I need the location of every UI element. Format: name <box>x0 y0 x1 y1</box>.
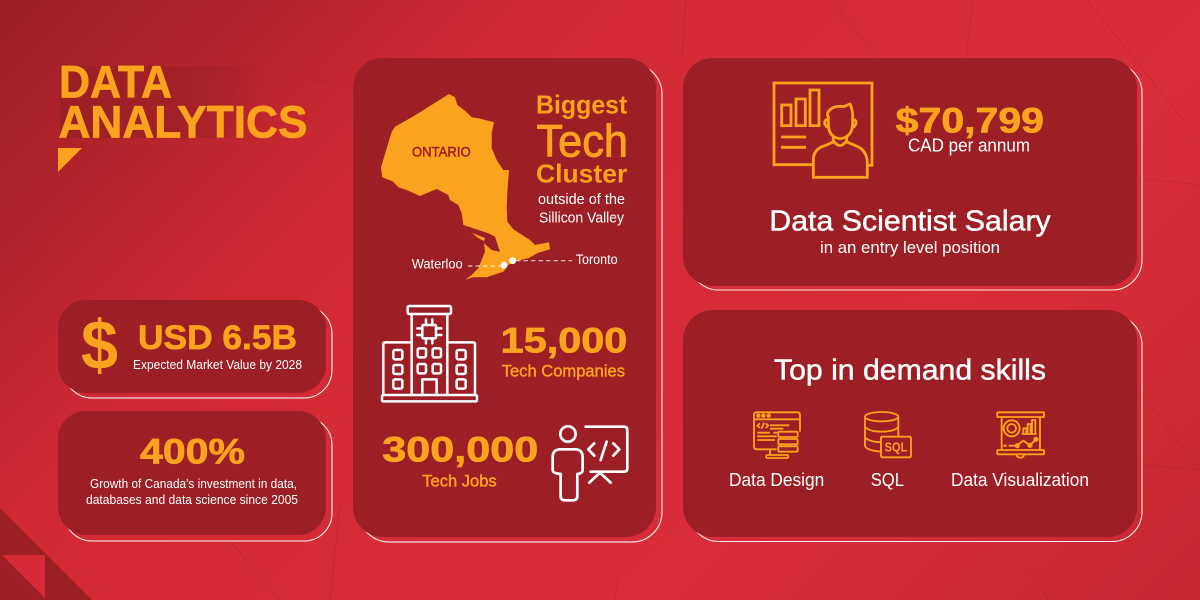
title accent triangle <box>58 148 82 172</box>
market value caption: Expected Market Value by 2028 <box>133 357 302 372</box>
market value figure: USD 6.5B <box>138 319 297 357</box>
marker: Waterloo: Waterloo <box>412 256 463 271</box>
heading: biggest tech cluster: Tech <box>536 116 628 167</box>
marker: Toronto <box>509 252 618 267</box>
icon: presentation board with charts <box>997 412 1044 458</box>
icon: tech building <box>382 306 477 401</box>
salary figure: $70,799 <box>896 101 1044 140</box>
growth caption <box>86 476 298 507</box>
growth caption: Growth of Canada's investment in data, <box>90 476 297 491</box>
panel: tech cluster <box>353 58 662 542</box>
salary unit: CAD per annum <box>908 136 1030 156</box>
tech jobs stat: 300,000 <box>382 431 538 470</box>
panel: investment growth <box>58 411 332 541</box>
subheading: outside of the Sillicon Valley: outside of the <box>538 191 625 208</box>
map: Ontario <box>381 94 550 280</box>
skill: data design <box>729 412 824 490</box>
decorative corner triangles <box>0 508 92 600</box>
marker: Waterloo <box>412 256 507 271</box>
panel: data scientist salary <box>683 58 1142 290</box>
tech jobs stat <box>382 431 538 491</box>
skill: data visualization <box>951 412 1089 490</box>
skill: SQL <box>865 412 911 490</box>
title block <box>58 57 308 172</box>
growth caption: databases and data science since 2005 <box>86 492 298 507</box>
subheading: outside of the Sillicon Valley: Sillicon Valley <box>539 209 624 226</box>
heading: biggest tech cluster: Biggest <box>536 90 628 120</box>
title: DATA ANALYTICS: DATA <box>59 57 172 108</box>
marker: Toronto: Toronto <box>576 252 618 267</box>
heading: biggest tech cluster <box>536 90 628 189</box>
tech companies stat: 15,000 <box>501 322 627 361</box>
skills heading: Top in demand skills <box>774 355 1046 387</box>
icon: presenter with code board <box>553 426 627 500</box>
icon: code window with servers <box>754 412 800 458</box>
title: DATA ANALYTICS: ANALYTICS <box>58 97 308 148</box>
label: Data Design: Data Design <box>729 470 824 490</box>
salary subheading: in an entry level position <box>820 238 1000 257</box>
growth figure: 400% <box>140 432 245 471</box>
tech companies stat: Tech Companies <box>502 362 625 381</box>
salary heading: Data Scientist Salary <box>769 206 1051 238</box>
icon: analyst with chart board <box>774 83 872 177</box>
tech companies stat <box>501 322 627 381</box>
tech jobs stat: Tech Jobs <box>422 472 497 491</box>
icon: database with SQL tag: SQL <box>885 441 908 455</box>
subheading: outside of the Sillicon Valley <box>538 191 625 226</box>
label: Data Visualization: Data Visualization <box>951 470 1089 490</box>
label: ONTARIO: ONTARIO <box>412 144 471 160</box>
panel: top in demand skills <box>683 310 1142 542</box>
title: DATA ANALYTICS <box>58 57 308 148</box>
panel: market value <box>58 300 332 398</box>
heading: biggest tech cluster: Cluster <box>536 159 627 189</box>
label: SQL: SQL <box>871 470 904 490</box>
icon: dollar sign: $ <box>81 306 118 384</box>
